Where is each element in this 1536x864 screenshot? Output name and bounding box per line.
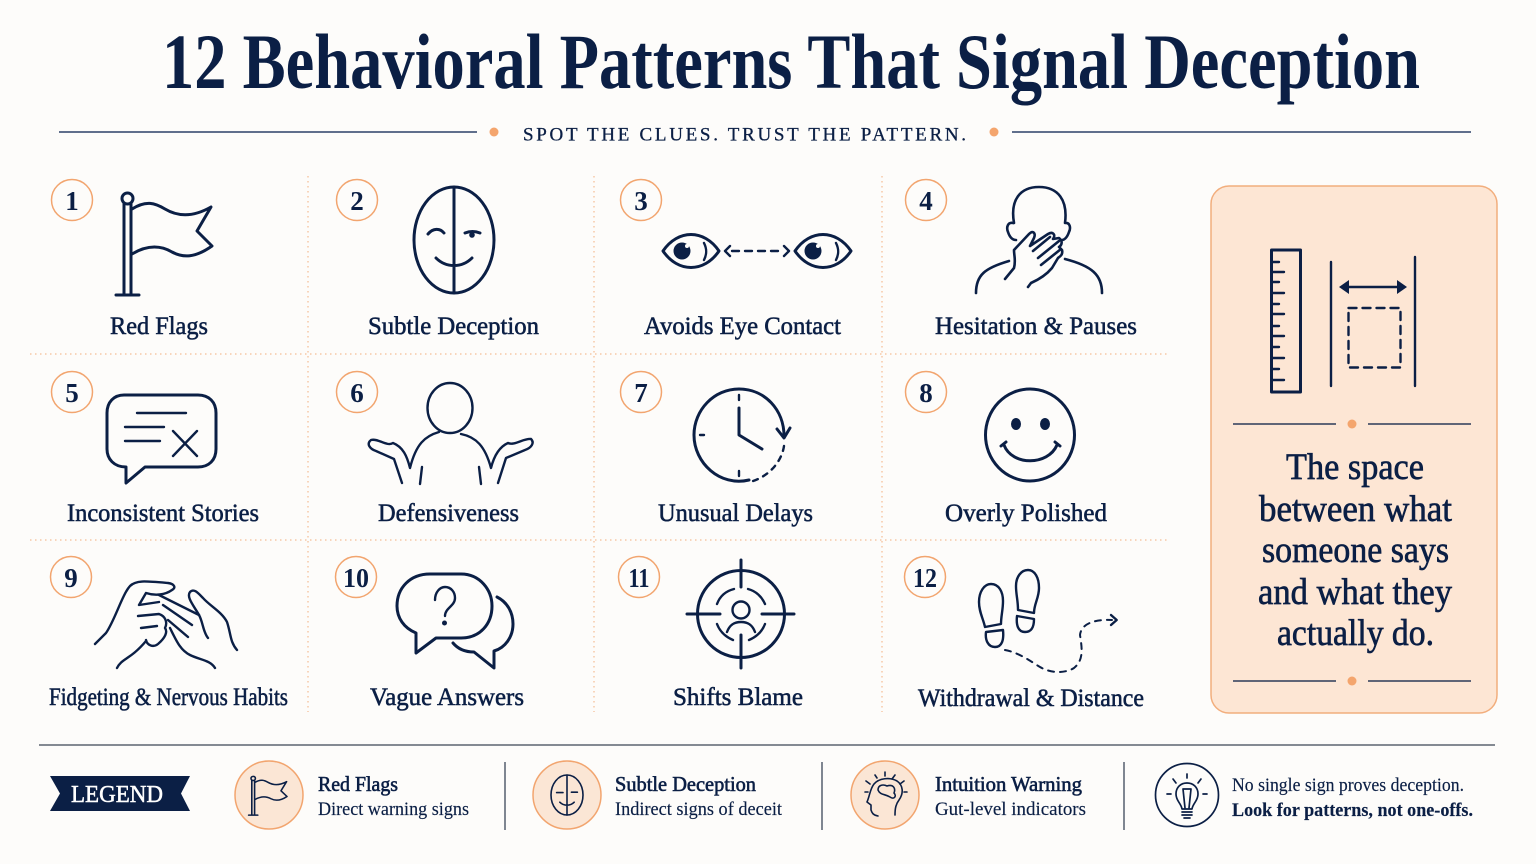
- icon: fidgeting hands: [95, 581, 237, 668]
- panel: 9 fidgeting: [49, 556, 288, 711]
- number 1: [52, 180, 92, 220]
- number 6: 6: [350, 378, 364, 408]
- label: Defensiveness: [378, 498, 519, 527]
- label: Fidgeting & Nervous Habits: [49, 682, 288, 711]
- legend item: red flags: [235, 761, 469, 829]
- subtitle with rules: [59, 124, 1471, 146]
- legend item: intuition warning: Intuition Warning: [935, 772, 1082, 796]
- number 4: 4: [919, 186, 933, 216]
- label: Withdrawal & Distance: [918, 683, 1144, 712]
- icon: eyes with arrow: [663, 234, 851, 268]
- label: Hesitation & Pauses: [935, 311, 1137, 340]
- quote text: actually do.: [1277, 613, 1434, 654]
- number 11: 11: [628, 563, 650, 593]
- panel: 2 subtle deception: [336, 180, 539, 340]
- label: Subtle Deception: [368, 311, 539, 340]
- panel: 10 vague answers: [336, 556, 524, 711]
- legend note with bulb icon: No single sign proves deception.: [1232, 776, 1464, 796]
- icon: smiley: [986, 389, 1074, 481]
- number 9: [50, 556, 92, 598]
- number 8: 8: [919, 378, 933, 408]
- legend item: subtle deception: Subtle Deception: [615, 772, 756, 796]
- icon: split face: [414, 187, 494, 293]
- label: Unusual Delays: [658, 498, 813, 527]
- icon: clock: [694, 389, 790, 481]
- panel: 6 defensiveness: [336, 372, 533, 527]
- icon: hand over mouth: [976, 187, 1102, 293]
- panel: quote callout: [1211, 186, 1497, 713]
- quote text: and what they: [1258, 572, 1452, 613]
- panel: 4 hesitation: [906, 180, 1137, 340]
- icon: shrugging person: [369, 383, 533, 484]
- label: Inconsistent Stories: [67, 498, 259, 527]
- icon: footprints and dashed path: [979, 570, 1117, 672]
- panel: 1 red flags: [52, 180, 212, 340]
- legend note with bulb icon: [1156, 764, 1473, 826]
- label: Red Flags: [110, 311, 208, 340]
- legend: [50, 761, 1473, 830]
- legend item: subtle deception: Indirect signs of deceit: [615, 800, 783, 820]
- legend note with bulb icon: Look for patterns, not one-offs.: [1232, 801, 1473, 821]
- label: Shifts Blame: [673, 682, 803, 711]
- number 10: 10: [343, 563, 369, 593]
- quote text: between what: [1259, 489, 1453, 530]
- number 5: 5: [65, 378, 79, 408]
- panel: 8 overly polished: [906, 372, 1107, 527]
- panel: 11 shifts blame: [618, 556, 803, 711]
- icon: flag: [116, 193, 212, 295]
- number 4: [906, 180, 946, 220]
- quote text: [1258, 447, 1453, 654]
- icon: question speech bubbles: [397, 574, 513, 668]
- label: Vague Answers: [370, 682, 524, 711]
- number 11: [618, 556, 660, 598]
- legend ribbon: LEGEND: [71, 782, 163, 808]
- panel: 7 unusual delays: [620, 372, 813, 527]
- quote text: The space: [1286, 447, 1424, 488]
- panel: 3 avoids eye contact: [620, 180, 851, 340]
- number 8: [906, 372, 946, 412]
- icon: target on person: [687, 560, 794, 668]
- icon: lightbulb: [1156, 764, 1218, 826]
- subtitle with rules: SPOT THE CLUES. TRUST THE PATTERN.: [523, 124, 966, 146]
- number 2: 2: [350, 186, 364, 216]
- label: Overly Polished: [945, 498, 1107, 527]
- number 3: [620, 180, 662, 220]
- number 7: [620, 372, 662, 412]
- icon: ruler and gap: [1272, 250, 1415, 392]
- panel: 12 withdrawal: [904, 556, 1144, 712]
- panel: 5 inconsistent stories: [52, 372, 259, 527]
- legend item: subtle deception: [533, 761, 783, 829]
- divider: top: [1233, 420, 1471, 428]
- legend item: red flags: Direct warning signs: [318, 800, 469, 820]
- number 3: 3: [634, 186, 648, 216]
- number 1: 1: [65, 186, 79, 216]
- icon: speech bubble with x: [107, 395, 216, 483]
- number 9: 9: [64, 563, 78, 593]
- number 12: [904, 556, 946, 598]
- number 7: 7: [634, 378, 648, 408]
- legend item: intuition warning: [851, 761, 1086, 829]
- number 2: [336, 180, 378, 220]
- legend ribbon: [50, 776, 190, 811]
- label: Avoids Eye Contact: [644, 311, 841, 340]
- legend item: intuition warning: Gut-level indicators: [935, 800, 1086, 820]
- number 5: [52, 372, 92, 412]
- legend item: red flags: Red Flags: [318, 772, 398, 796]
- number 10: [336, 556, 376, 598]
- number 6: [336, 372, 378, 412]
- number 12: 12: [913, 563, 937, 593]
- quote text: someone says: [1262, 530, 1449, 571]
- divider: bottom: [1233, 676, 1471, 686]
